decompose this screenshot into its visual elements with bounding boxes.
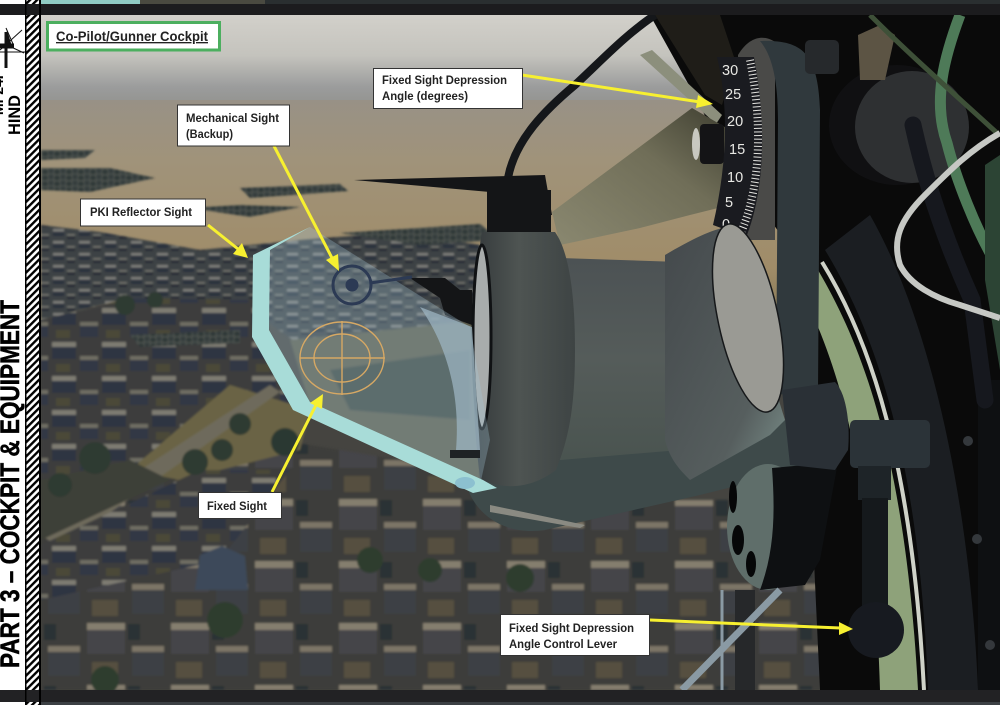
callout: fixed sight: Fixed Sight (207, 501, 267, 513)
horizontal grip (850, 420, 930, 468)
callout: depression angle (374, 68, 522, 108)
brass fitting (858, 25, 895, 80)
dial scale: 25 (725, 87, 741, 103)
ball grip (848, 602, 904, 658)
terrain: city blocks and fields (41, 150, 840, 694)
callout: control lever: Angle Control Lever (509, 639, 618, 651)
lower rail (735, 590, 755, 690)
callout: control lever (500, 614, 650, 656)
front lens (473, 245, 491, 429)
vertical stem (858, 466, 891, 500)
callout: fixed sight (198, 492, 282, 518)
inner curved glass mount (420, 307, 480, 450)
callout: control lever: Fixed Sight Depression (509, 623, 634, 635)
dial scale: 10 (727, 170, 743, 186)
mechanical sight ring (333, 266, 412, 304)
top image strip (41, 0, 1000, 4)
white cable (897, 133, 1000, 318)
collar (473, 232, 575, 486)
heading: cockpit title box (48, 22, 220, 50)
dial scale: 30 (722, 63, 738, 79)
lever assembly (682, 382, 930, 690)
callout: mechanical sight: (Backup) (186, 129, 233, 141)
reflector sight glass (252, 227, 497, 493)
dial scale: 0 (722, 217, 730, 233)
rear lens (699, 218, 797, 418)
dial scale: 15 (729, 142, 745, 158)
right cockpit structure (815, 15, 1000, 690)
black frame (825, 215, 978, 690)
support arm (760, 41, 820, 395)
arrow: depression angle (522, 75, 713, 108)
frame bolts (963, 436, 995, 650)
sight blade (354, 175, 552, 218)
callout: mechanical sight: Mechanical Sight (186, 113, 279, 125)
rear bracket (410, 278, 472, 325)
sight body (473, 218, 797, 486)
pale diagonal tube (682, 590, 780, 690)
callout: mechanical sight (178, 105, 290, 146)
neck (560, 258, 680, 460)
dial scale: 20 (727, 114, 743, 130)
canopy ring: green band (815, 265, 918, 690)
lower body under reflector (468, 420, 800, 531)
black cable (508, 15, 655, 178)
heading: cockpit title box: Co-Pilot/Gunner Cockpit (56, 29, 208, 44)
green cable (940, 15, 1000, 270)
callout: PKI reflector: PKI Reflector Sight (90, 207, 192, 219)
helicopter icon (0, 28, 25, 68)
callout: PKI reflector (80, 199, 206, 226)
dial scale: 5 (725, 195, 733, 211)
arrow: PKI sight (208, 225, 248, 258)
arrow: fixed sight (272, 394, 323, 492)
hatch stripe (26, 15, 39, 690)
callout: depression angle: Fixed Sight Depression (382, 75, 507, 87)
dial scale (713, 57, 762, 240)
black braided hose (913, 125, 985, 400)
left sidebar (0, 0, 41, 705)
canopy ring: white line (822, 262, 924, 690)
fixed sight reticle (300, 321, 385, 395)
aircraft name: HIND (5, 95, 24, 135)
arrow: control lever (650, 620, 853, 635)
perforated disc (727, 464, 809, 590)
glass rim (252, 227, 497, 493)
lever hub (782, 382, 849, 470)
rear flare (665, 228, 785, 480)
round canister (829, 65, 965, 185)
callout: depression angle: Angle (degrees) (382, 91, 468, 103)
depression angle dial assembly (692, 38, 839, 395)
canopy frame and background structure (552, 15, 1000, 690)
dial backing disc (738, 38, 775, 240)
arrow: mechanical sight (274, 146, 339, 271)
side knob (692, 124, 724, 164)
